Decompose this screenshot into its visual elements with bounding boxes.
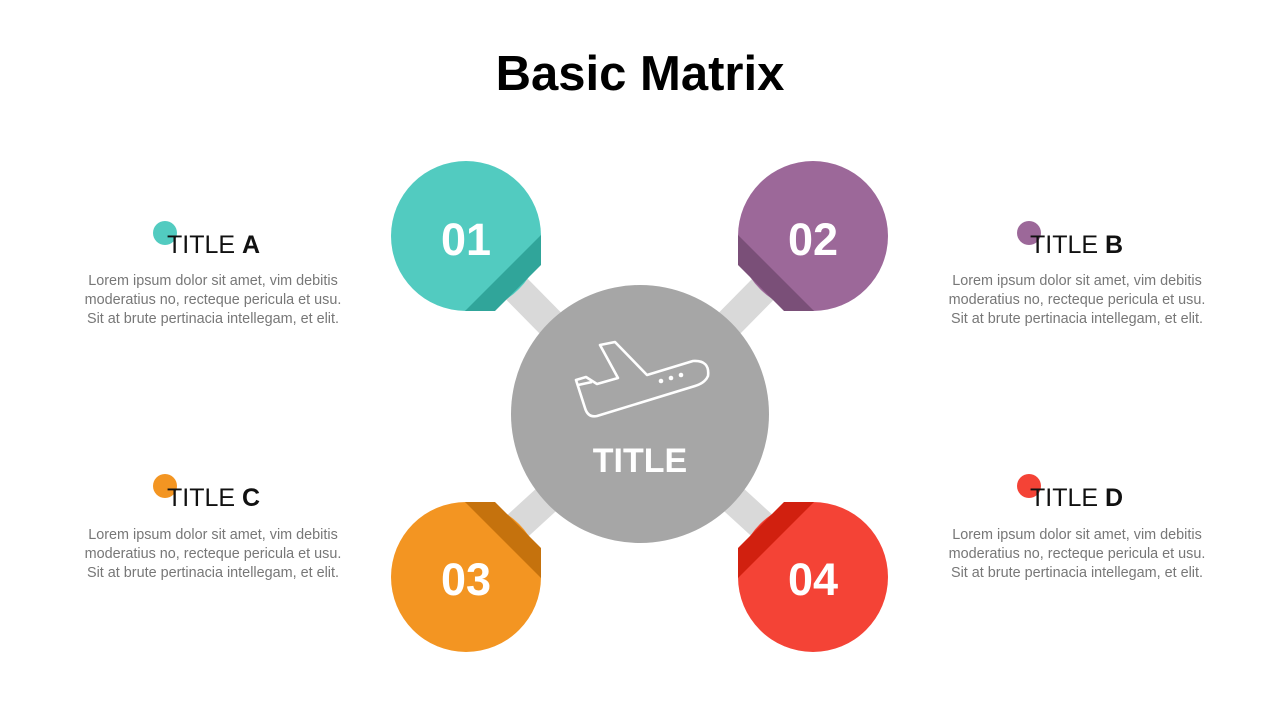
circle 02 xyxy=(738,161,888,311)
circle 04 xyxy=(738,502,888,652)
center circle: TITLE xyxy=(593,442,687,480)
center circle xyxy=(511,285,769,543)
text: moderatius no, recteque pericula et usu. xyxy=(949,546,1205,562)
item A xyxy=(85,221,341,327)
circle 02: 02 xyxy=(788,214,838,265)
text: Lorem ipsum dolor sit amet, vim debitis xyxy=(88,273,338,289)
title: Basic Matrix xyxy=(496,47,784,101)
circle 04: 04 xyxy=(788,554,838,605)
text: TITLE B xyxy=(1030,231,1123,259)
text: Sit at brute pertinacia intellegam, et elit. xyxy=(951,311,1203,327)
item B xyxy=(949,221,1205,327)
item C xyxy=(85,474,341,581)
text: TITLE C xyxy=(167,484,260,512)
circle 01: 01 xyxy=(441,214,491,265)
text: Sit at brute pertinacia intellegam, et elit. xyxy=(87,311,339,327)
text: moderatius no, recteque pericula et usu. xyxy=(949,292,1205,308)
text: Sit at brute pertinacia intellegam, et elit. xyxy=(951,565,1203,581)
text: moderatius no, recteque pericula et usu. xyxy=(85,546,341,562)
text: moderatius no, recteque pericula et usu. xyxy=(85,292,341,308)
icon: plane xyxy=(576,342,708,416)
text: Lorem ipsum dolor sit amet, vim debitis xyxy=(952,527,1202,543)
connectors xyxy=(500,272,780,542)
item D xyxy=(949,474,1205,581)
text: TITLE D xyxy=(1030,484,1123,512)
circle 03: 03 xyxy=(441,554,491,605)
circle 01 xyxy=(391,161,541,311)
text: TITLE A xyxy=(167,231,260,259)
text: Sit at brute pertinacia intellegam, et elit. xyxy=(87,565,339,581)
circle 03 xyxy=(391,502,541,652)
text: Lorem ipsum dolor sit amet, vim debitis xyxy=(88,527,338,543)
text: Lorem ipsum dolor sit amet, vim debitis xyxy=(952,273,1202,289)
